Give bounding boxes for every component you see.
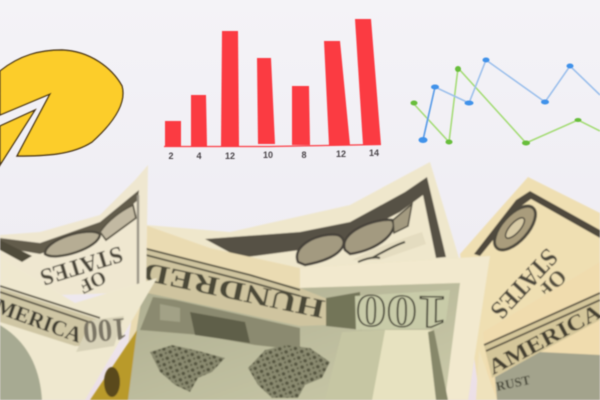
bar labels: 12 bbox=[336, 149, 346, 159]
back right bill: OF bbox=[533, 264, 572, 304]
pie main body bbox=[0, 50, 123, 156]
bar labels: 12 bbox=[225, 151, 235, 161]
bar axis bbox=[164, 144, 381, 146]
green field bbox=[125, 283, 460, 400]
back left bill: OF bbox=[75, 266, 110, 298]
banknotes bbox=[0, 162, 600, 400]
bill figure: 100: 100 bbox=[355, 285, 448, 338]
bar labels: 8 bbox=[301, 150, 307, 160]
gold sliver bbox=[90, 330, 137, 400]
back left bill bbox=[0, 165, 148, 298]
front left bill bbox=[0, 258, 157, 400]
pie slice bbox=[0, 110, 35, 165]
oval portrait area bbox=[372, 330, 445, 400]
bar labels: 10 bbox=[263, 150, 273, 160]
lower right bill: RUST bbox=[495, 372, 532, 394]
bar labels: 2 bbox=[168, 151, 174, 161]
right sliver bill bbox=[476, 350, 497, 400]
front center bill bbox=[120, 225, 490, 400]
bar labels: 14 bbox=[369, 148, 379, 158]
tree left bbox=[150, 345, 225, 392]
bill text: hundred: HUNDRED bbox=[140, 257, 327, 324]
line chart bbox=[410, 58, 600, 146]
lower right bill bbox=[483, 262, 600, 400]
front left bill: 100 bbox=[82, 311, 129, 351]
tree right bbox=[248, 345, 330, 398]
back right bill bbox=[460, 177, 600, 400]
bar labels: 4 bbox=[196, 151, 202, 161]
engraved band bbox=[143, 248, 330, 326]
back left bill: STATES bbox=[37, 240, 126, 290]
green series bbox=[410, 66, 600, 146]
lower right bill: AMERICA bbox=[484, 299, 600, 379]
blue series bbox=[418, 58, 600, 143]
building engraving bbox=[140, 297, 300, 350]
bar chart bbox=[164, 19, 381, 161]
back right bill: STATES bbox=[485, 243, 564, 325]
back center bill bbox=[147, 162, 459, 285]
pie chart bbox=[0, 50, 123, 165]
bar labels bbox=[168, 148, 379, 161]
bars bbox=[165, 19, 381, 146]
